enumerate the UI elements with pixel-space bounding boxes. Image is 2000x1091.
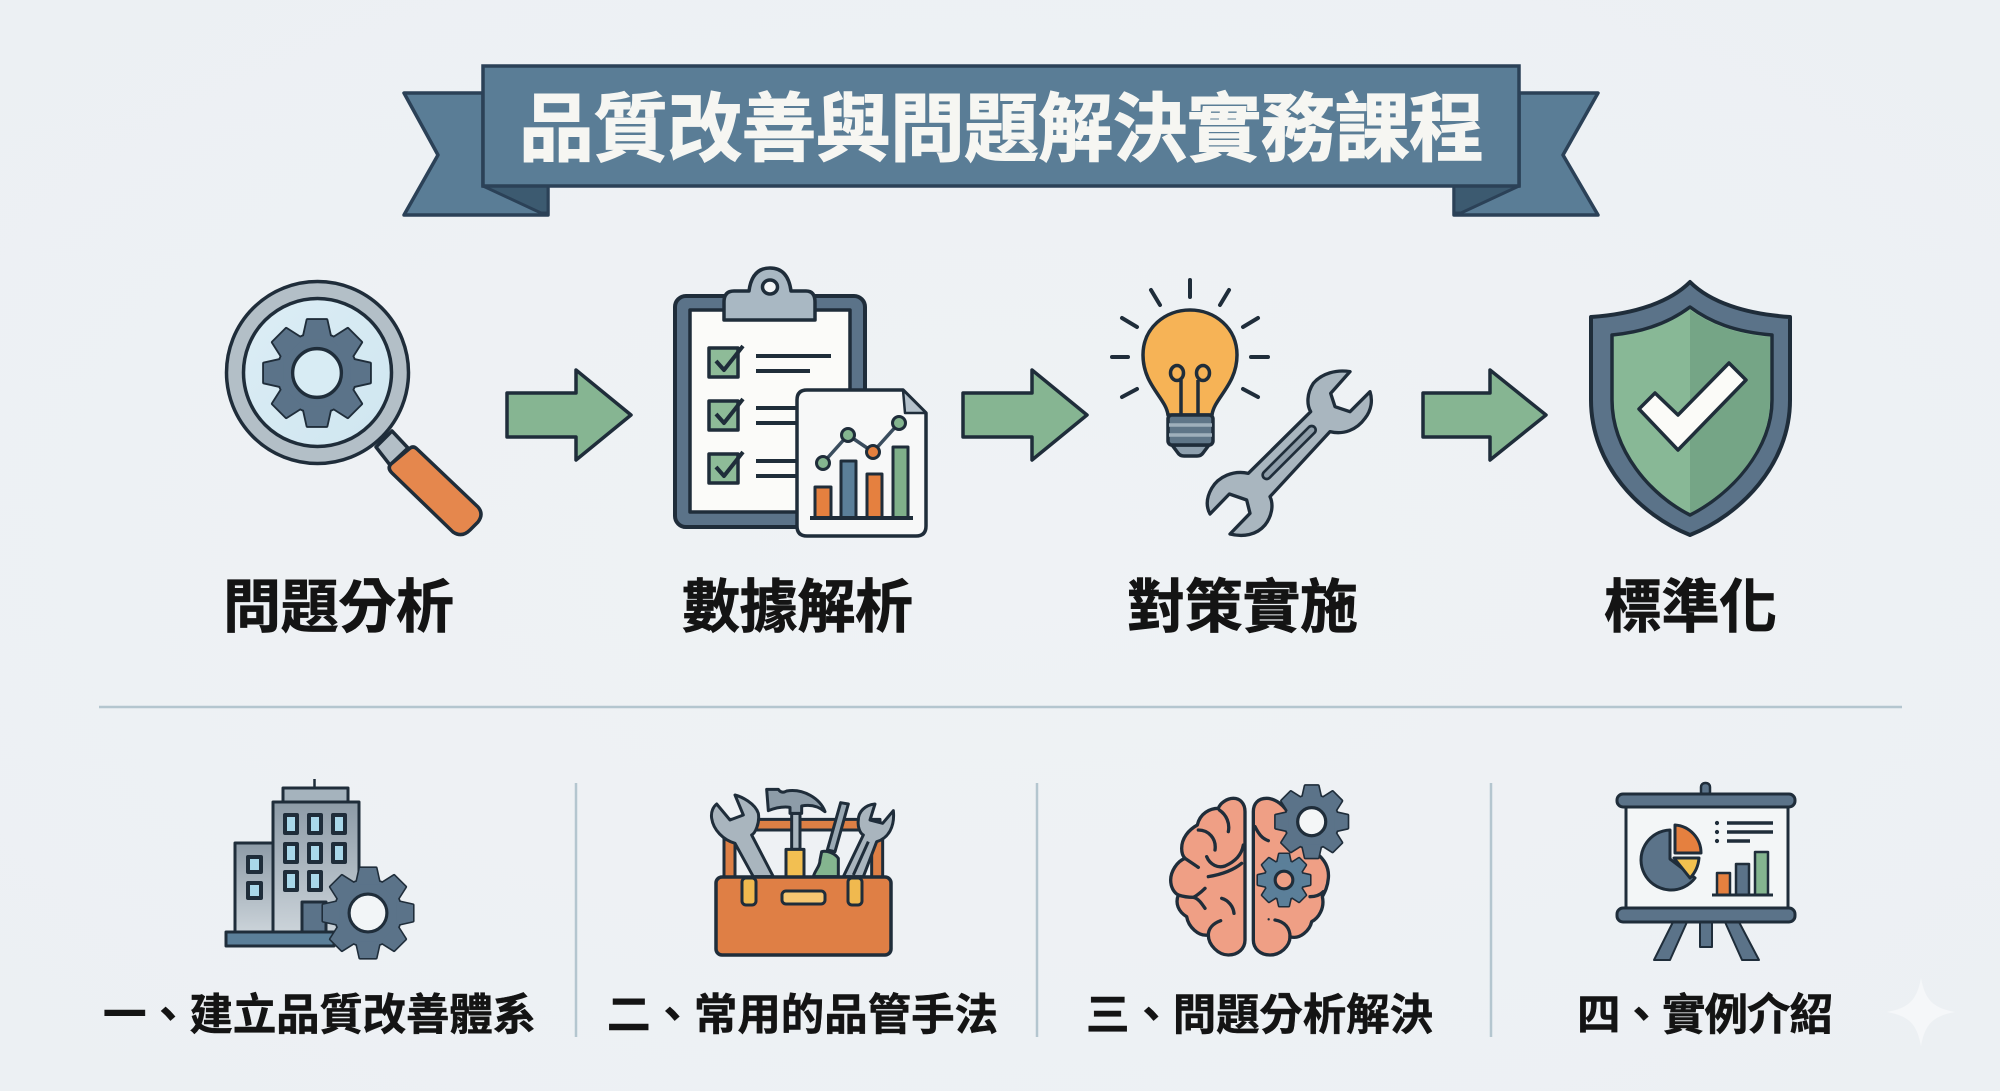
step 1: problem analysis <box>223 282 481 640</box>
label: standardization: 標準化 <box>1604 575 1777 640</box>
topic 4: case studies <box>1577 783 1833 1040</box>
icon: magnifying glass with gear <box>226 282 481 535</box>
step 4: standardization <box>1591 282 1790 640</box>
label: topic 1: 一、建立品質改善體系 <box>103 992 536 1040</box>
arrow 2 <box>963 370 1087 460</box>
left ribbon fold <box>483 186 548 213</box>
label: problem analysis: 問題分析 <box>223 575 454 640</box>
topic 3: problem analysis and solving <box>1086 786 1433 1040</box>
label: countermeasure implementation: 對策實施 <box>1127 575 1358 640</box>
watermark sparkle <box>1887 978 1955 1046</box>
label: data analysis: 數據解析 <box>682 575 913 640</box>
icon: presentation board <box>1617 783 1795 960</box>
right ribbon tail <box>1454 93 1598 215</box>
label: topic 4: 四、實例介紹 <box>1577 992 1833 1040</box>
label: topic 2: 二、常用的品管手法 <box>607 992 998 1040</box>
icon: wrench <box>1207 371 1371 535</box>
title text: 品質改善與問題解決實務課程 <box>519 87 1484 171</box>
arrow 1 <box>507 370 631 460</box>
step 2: data analysis <box>675 268 926 640</box>
right ribbon fold <box>1454 186 1519 213</box>
topic 1: build quality improvement system <box>103 779 536 1040</box>
topic 2: common quality tools <box>607 789 998 1040</box>
left ribbon tail <box>404 93 548 215</box>
icon: light bulb <box>1112 280 1268 456</box>
label: topic 3: 三、問題分析解決 <box>1086 992 1433 1040</box>
main ribbon band <box>483 66 1519 186</box>
arrow 3 <box>1423 370 1546 460</box>
icon: clipboard with checklist <box>675 268 865 527</box>
icon: shield with check <box>1591 282 1790 535</box>
step 3: countermeasure implementation <box>1112 280 1371 640</box>
icon: brain with gears <box>1171 786 1348 955</box>
icon: report with chart <box>797 390 926 536</box>
title ribbon banner <box>404 66 1598 215</box>
icon: building with gear <box>226 779 413 958</box>
icon: toolbox with tools <box>711 789 894 955</box>
